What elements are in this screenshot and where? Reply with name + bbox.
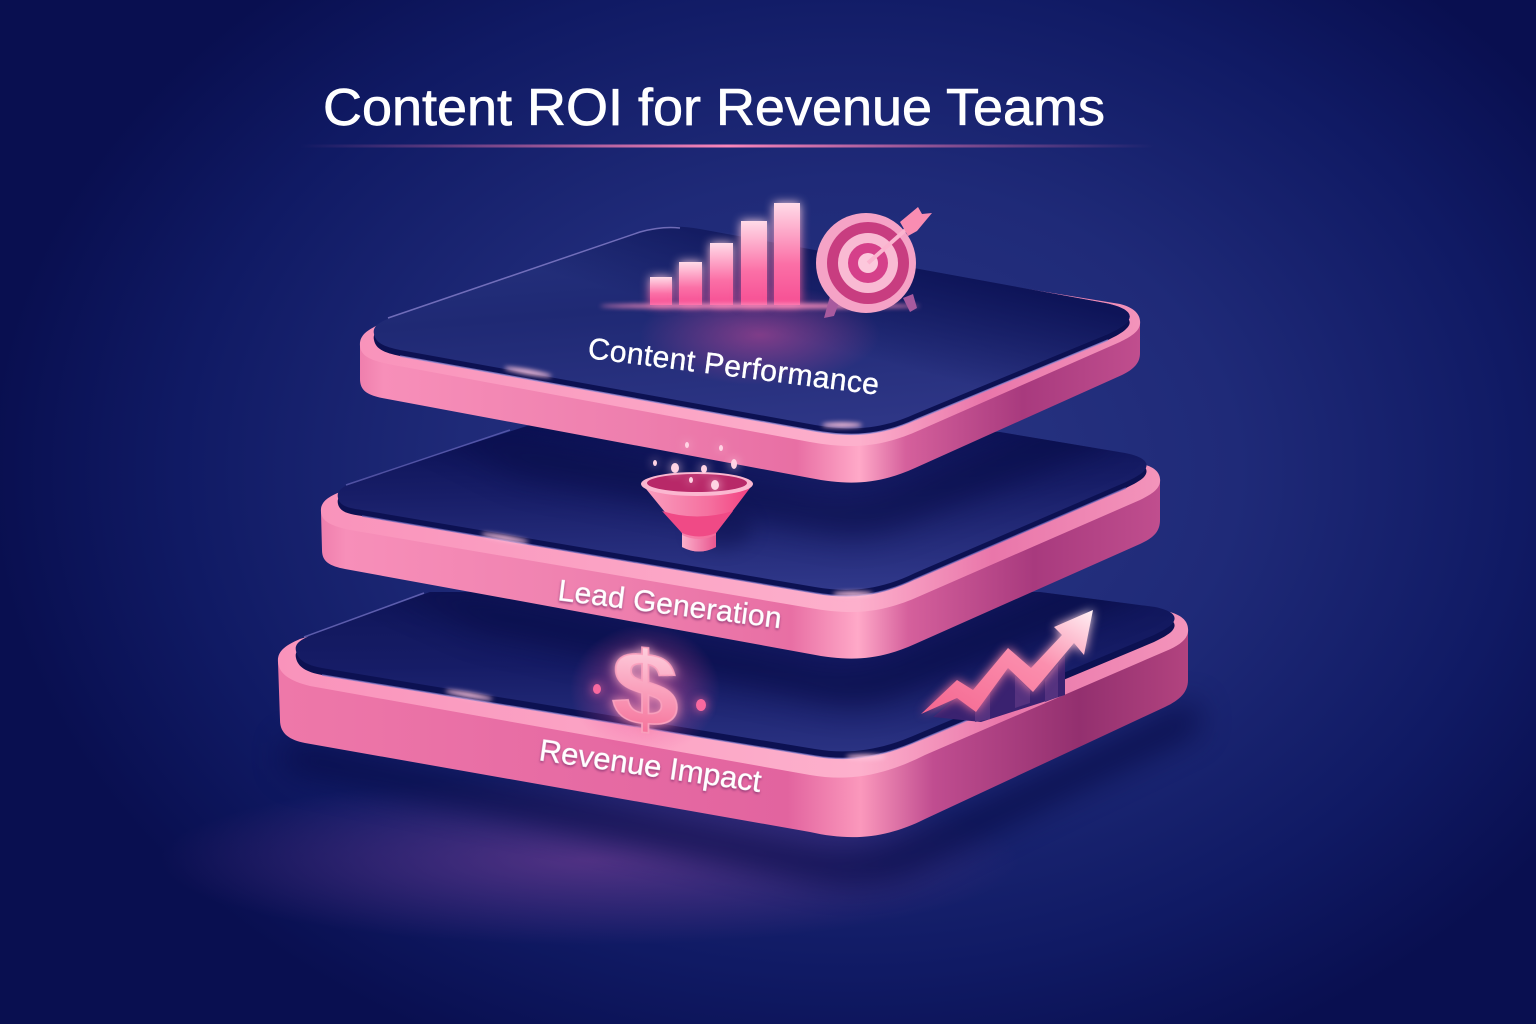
panel: lead generation platform (321, 405, 1160, 659)
cast shadow on revenue surface (430, 593, 1123, 716)
platform base: lead (338, 431, 1147, 596)
platform surface: lead (338, 425, 1147, 590)
sparkle 7 (689, 477, 693, 483)
label: lead generation: Lead Generation (556, 574, 783, 635)
edge highlight: content (388, 228, 1108, 434)
sparkle 2 (719, 445, 723, 451)
sparkle: content left (504, 365, 552, 379)
sparkle: lead front (833, 592, 873, 596)
icon: target (816, 207, 932, 318)
title underline (300, 144, 1155, 148)
platform rim: lead (321, 432, 1160, 612)
bar 2 (679, 262, 702, 305)
panel: revenue impact platform (278, 592, 1188, 838)
surface shading: content (374, 227, 1130, 428)
target arrow fletching (900, 207, 932, 236)
bar 5 (774, 203, 800, 305)
icon: trend arrow (921, 610, 1093, 722)
platform base: content (374, 233, 1130, 434)
funnel band (662, 511, 733, 536)
funnel rim (641, 472, 753, 496)
shadow shape: revenue (430, 593, 1123, 716)
sparkle: content front (822, 422, 862, 428)
shadow shape: lead (484, 437, 1096, 546)
icon: dollar sparkle right (696, 699, 706, 711)
funnel sparkles (653, 442, 737, 490)
target ring 4 (848, 243, 888, 283)
platform base: revenue (296, 599, 1175, 758)
bar 1 (650, 277, 672, 305)
trend arrow line (921, 610, 1093, 714)
sparkle 5 (701, 465, 707, 473)
sparkle: revenue front (846, 754, 886, 760)
label: revenue impact: Revenue Impact (537, 732, 764, 799)
bar 3 (710, 243, 733, 305)
platform surface: content (374, 227, 1130, 428)
icon: bar chart (600, 203, 920, 308)
platform shadow (285, 700, 1200, 881)
target stand right (903, 294, 917, 312)
title: Content ROI for Revenue Teams (323, 79, 1105, 137)
cast shadow on lead surface (484, 437, 1096, 546)
surface glow: content (640, 285, 880, 385)
target ring 2 (827, 222, 909, 304)
target ring 3 (838, 233, 898, 293)
bar 4 (741, 221, 767, 305)
funnel opening (647, 474, 747, 492)
icon: dollar glow (570, 625, 720, 755)
sparkle 8 (711, 480, 719, 490)
platform rim: revenue (278, 600, 1188, 778)
edge highlight: revenue (304, 593, 1040, 758)
sparkle 6 (731, 459, 737, 469)
trend arrow bar stripes (975, 664, 1058, 722)
sparkle 1 (685, 442, 689, 448)
target stand left (824, 296, 840, 318)
sparkle 3 (653, 460, 657, 466)
sparkle 4 (671, 463, 679, 473)
platform rim: content (360, 236, 1140, 446)
target bullseye (858, 253, 878, 273)
funnel cone (642, 484, 753, 552)
label: content performance: Content Performance (586, 332, 881, 402)
sparkle: lead left (481, 531, 529, 545)
icon: dollar sparkle left (593, 684, 601, 694)
platform surface: revenue (296, 592, 1175, 751)
floor glow (160, 775, 1020, 945)
target arrow shaft (868, 226, 910, 263)
funnel neck (682, 535, 716, 552)
icon: funnel (641, 442, 753, 552)
bar baseline glow (600, 304, 920, 308)
funnel shadow (692, 508, 752, 548)
platform side: revenue (278, 600, 1188, 837)
platform side: content (360, 300, 1140, 483)
icon: dollar sign: $ (611, 628, 679, 751)
target outer ring (816, 213, 916, 313)
sparkle: revenue left (445, 688, 493, 702)
panel: content performance platform (360, 203, 1140, 483)
platform side: lead (321, 440, 1160, 659)
edge highlight: lead (346, 430, 1126, 596)
trend arrow bars (933, 655, 1065, 722)
